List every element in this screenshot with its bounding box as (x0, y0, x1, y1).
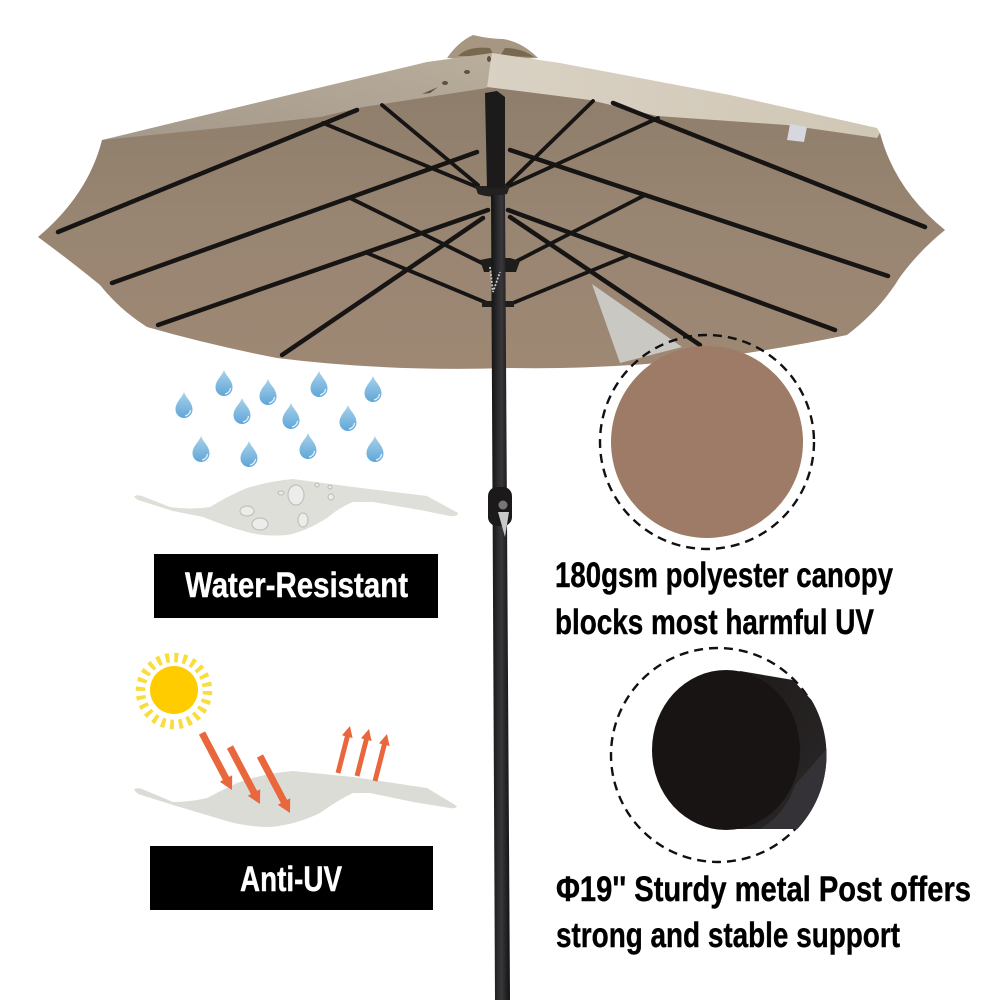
post end cap (652, 670, 800, 830)
upper hub (475, 186, 510, 196)
label text: Water-Resistant (185, 566, 408, 605)
label background (150, 846, 433, 910)
care label (787, 124, 807, 142)
label background (154, 554, 438, 618)
water-resistant fabric illustration (134, 479, 458, 536)
beads of water (240, 483, 334, 530)
crank handle (498, 512, 509, 537)
callout: canopy fabric (555, 284, 893, 642)
pointer wedge (592, 284, 682, 363)
lower hub (480, 258, 520, 272)
canopy lit outer panel left (102, 53, 492, 140)
callout: metal post (556, 648, 971, 955)
label: water-resistant (154, 554, 438, 618)
lower fittings (482, 301, 514, 307)
crank knob (498, 500, 508, 510)
sun rays (140, 658, 208, 724)
incoming UV arrows (199, 731, 290, 813)
lift chain (490, 267, 500, 292)
umbrella pole (485, 91, 512, 1000)
water drops (176, 370, 384, 467)
upper pole (485, 91, 505, 188)
callout text: 180gsm polyester canopy (555, 556, 893, 595)
canopy lit outer panel right (487, 53, 880, 138)
canopy wrinkles (422, 56, 491, 94)
lower pole (491, 195, 510, 1000)
reflected UV arrows (336, 726, 390, 782)
canopy crown (447, 35, 538, 60)
callout text: strong and stable support (556, 916, 900, 955)
canopy underside (38, 75, 945, 369)
fabric swatch (134, 479, 458, 536)
callout text: blocks most harmful UV (555, 603, 875, 642)
anti-UV fabric illustration (134, 726, 457, 827)
crank (488, 487, 512, 526)
label text: Anti-UV (240, 860, 343, 899)
fabric swatch (611, 346, 803, 538)
sun disc (150, 666, 198, 714)
dashed ring (611, 648, 825, 862)
icon: sun (140, 658, 208, 724)
canopy ribs (58, 101, 925, 355)
fabric swatch (134, 771, 457, 827)
dashed ring (600, 335, 814, 549)
label: anti-UV (150, 846, 433, 910)
umbrella canopy (38, 35, 945, 369)
post side (738, 671, 826, 829)
